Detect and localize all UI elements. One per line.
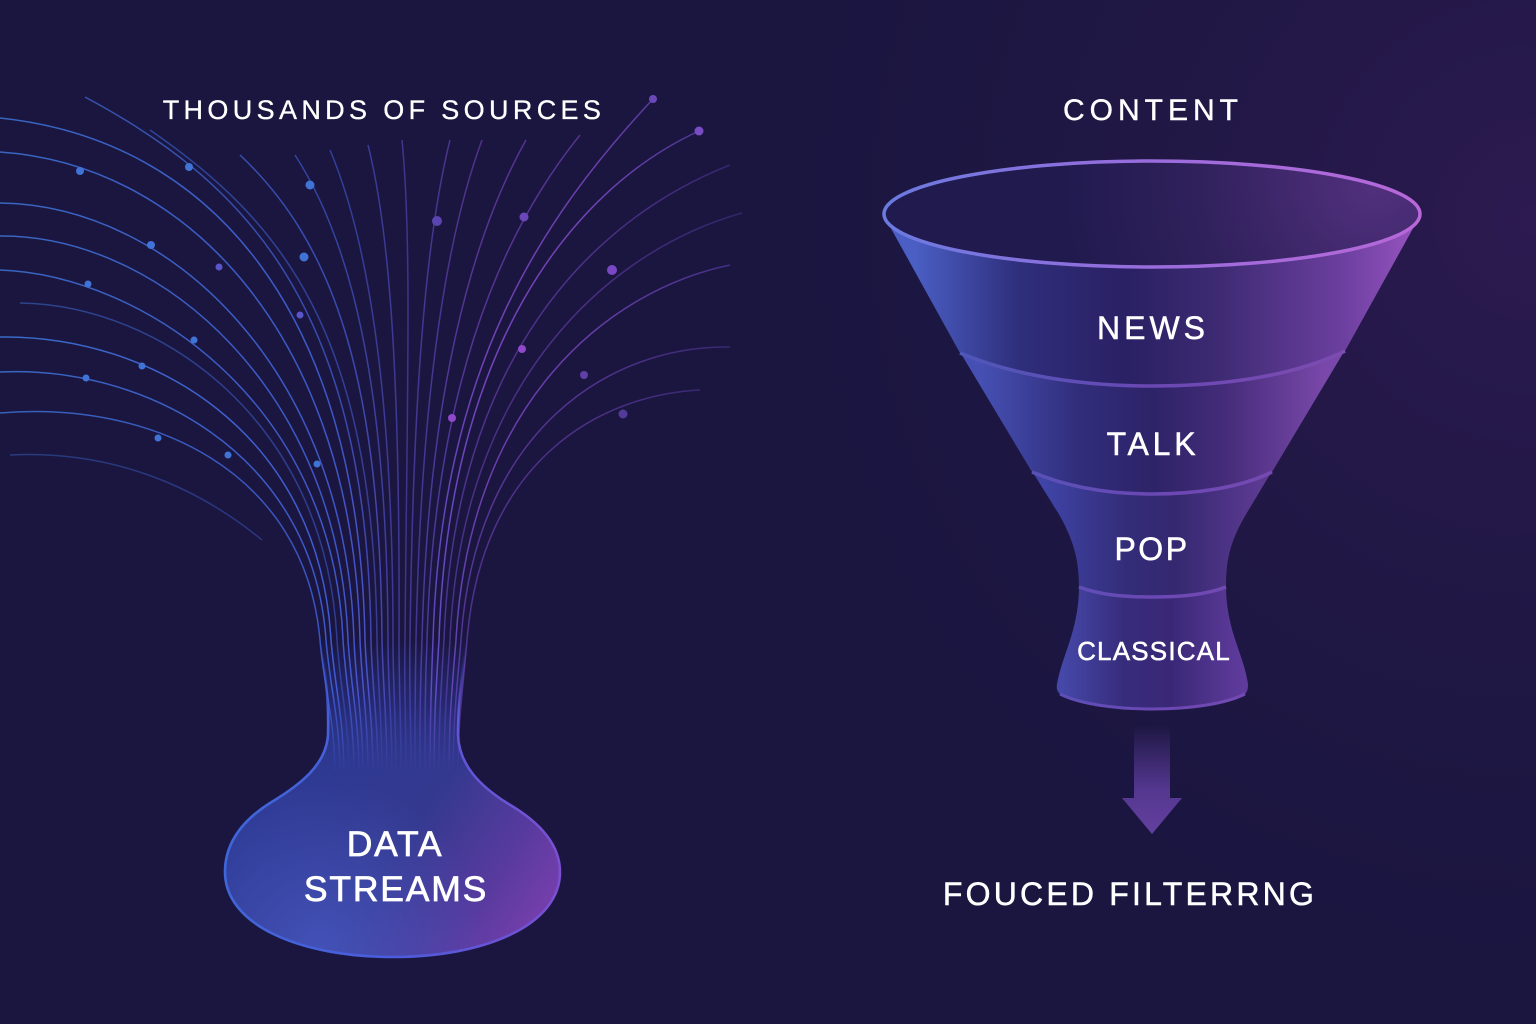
- label: pop: POP: [1114, 531, 1190, 567]
- heading: content: CONTENT: [1063, 94, 1243, 127]
- stream lines: [0, 97, 742, 775]
- funnel bands: [960, 351, 1345, 709]
- data streams reservoir: [225, 640, 560, 957]
- label: data streams: STREAMS: [304, 869, 488, 909]
- label: talk: TALK: [1107, 426, 1199, 462]
- label: news: NEWS: [1097, 310, 1209, 346]
- node dots: [76, 95, 704, 468]
- funnel opening: [884, 161, 1420, 267]
- arrow down: [1122, 725, 1182, 834]
- label: classical: CLASSICAL: [1077, 636, 1231, 666]
- panel: content funnel: [883, 94, 1421, 912]
- label: data streams: DATA: [347, 824, 443, 864]
- caption: focused filtering: FOUCED FILTERRNG: [943, 876, 1317, 912]
- heading: thousands of sources: THOUSANDS OF SOURCES: [163, 95, 605, 125]
- funnel body: [883, 161, 1421, 710]
- panel: data streams fan: [0, 95, 742, 957]
